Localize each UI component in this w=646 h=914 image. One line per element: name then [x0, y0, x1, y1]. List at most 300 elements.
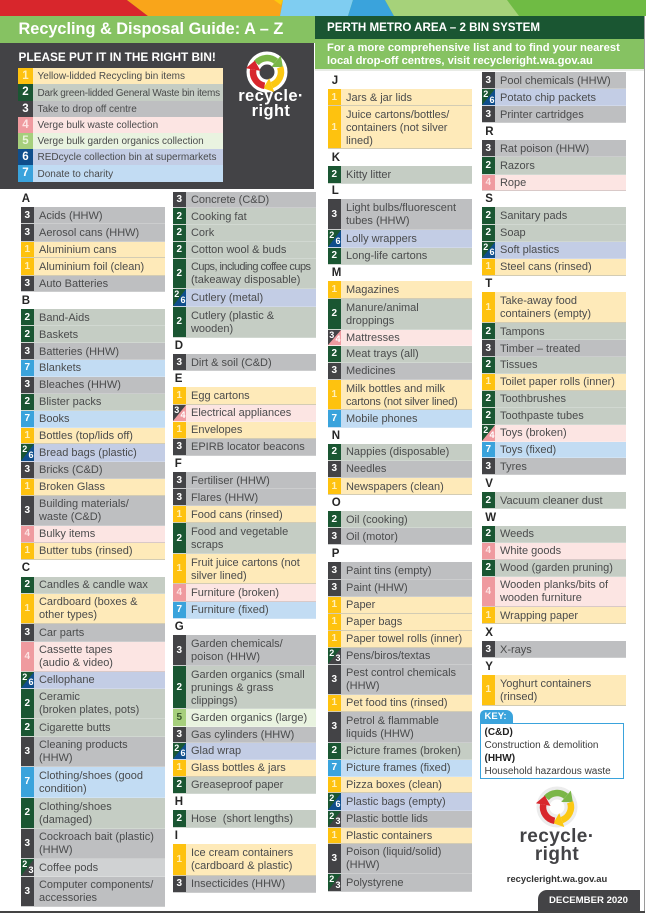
Mobile phones [328, 410, 472, 428]
Cardboard: other types) [39, 609, 97, 621]
Cassette tapes: (audio & video) [39, 657, 113, 669]
Clothing damaged [21, 798, 165, 829]
Pool chemicals [482, 72, 626, 89]
Flares: Flares (HHW) [191, 492, 258, 504]
Medicines: 3 [332, 365, 337, 376]
Poison: (HHW) [346, 859, 380, 871]
Nappies: 2 [332, 446, 337, 457]
Egg cartons [173, 387, 316, 405]
Long-life cartons [328, 248, 472, 265]
Polystyrene: Polystyrene [346, 877, 403, 889]
Rat poison: Rat poison (HHW) [500, 143, 589, 155]
legend row 2: 2 [22, 86, 29, 98]
Glass bottles: 1 [177, 762, 182, 773]
website info banner [315, 39, 644, 69]
Computer components: accessories [39, 892, 97, 904]
heading K: K [332, 152, 340, 164]
Cooking fat [173, 208, 316, 225]
Milk bottles: cartons (not silver lined) [346, 396, 458, 408]
Sanitary pads: Sanitary pads [500, 210, 567, 222]
Manure: Manure/animal [346, 302, 419, 314]
Picture frames fixed: Picture frames (fixed) [346, 762, 451, 774]
Furniture fixed: Furniture (fixed) [191, 604, 269, 616]
Steel cans [482, 259, 626, 276]
X-rays: 3 [486, 644, 491, 655]
Cork: Cork [191, 227, 214, 239]
Furniture broken [173, 584, 316, 602]
legend row 6: REDcycle collection bin at supermarkets [38, 152, 216, 163]
X-rays: X-rays [500, 644, 532, 656]
Pizza boxes: 1 [332, 779, 337, 790]
Juice cartons: Juice cartons/bottles/ [346, 109, 449, 121]
Building materials: Building materials/ [39, 498, 129, 510]
Dirt: 3 [177, 357, 182, 368]
Toothbrushes: 2 [486, 393, 491, 404]
Gas cylinders [173, 727, 316, 743]
legend row 1: Yellow-lidded Recycling bin items [38, 71, 185, 82]
Pet food tins [328, 695, 472, 712]
Pet food tins: Pet food tins (rinsed) [346, 697, 447, 709]
Clothing damaged: Clothing/shoes [39, 801, 112, 813]
Hose [173, 810, 316, 828]
heading C: C [22, 562, 30, 574]
legend row 1 [18, 68, 223, 84]
White goods [482, 543, 626, 560]
key tab: KEY: [484, 711, 506, 722]
Potato chip packets: Potato chip packets [500, 92, 596, 104]
Bread bags: Bread bags (plastic) [39, 447, 137, 459]
Cutlery metal: 2 [174, 289, 179, 299]
Garden organics small [173, 666, 316, 709]
title bar: Recycling & Disposal Guide: A – Z [18, 20, 283, 38]
wordmark [238, 87, 304, 120]
Nappies: Nappies (disposable) [346, 446, 449, 458]
Soft plastics: Soft plastics [500, 244, 559, 256]
Toys broken: Toys (broken) [500, 427, 567, 439]
Bricks: 3 [25, 464, 30, 475]
Food cans [173, 506, 316, 523]
Petrol: 3 [332, 721, 337, 732]
Clothing good: Clothing/shoes (good [39, 770, 143, 782]
Paper bags: Paper bags [346, 616, 402, 628]
Soap: 2 [486, 227, 491, 238]
Picture frames fixed [328, 760, 472, 777]
Wood: Wood (garden pruning) [500, 562, 613, 574]
Magazines: Magazines [346, 284, 399, 296]
Milk bottles: 1 [332, 389, 337, 400]
Plastic bottle lids: 3 [335, 816, 340, 826]
Pest control: 3 [332, 674, 337, 685]
Petrol: liquids (HHW) [346, 728, 414, 740]
Pest control: Pest control chemicals [346, 667, 456, 679]
Toothbrushes: Toothbrushes [500, 393, 566, 405]
Tyres: 3 [486, 461, 491, 472]
Rat poison: 3 [486, 143, 491, 154]
heading F: F [175, 458, 182, 470]
Insecticides: 3 [177, 878, 182, 889]
Paint: 3 [332, 582, 337, 593]
Soft plastics: 6 [489, 247, 494, 257]
Batteries: 3 [25, 346, 30, 357]
Toys broken: 2 [483, 425, 488, 435]
Picture frames broken [328, 743, 472, 760]
Garden chemicals: 3 [177, 645, 182, 656]
heading V: V [485, 478, 493, 490]
Potato chip packets: 6 [489, 95, 494, 105]
Cutlery plastic: 2 [177, 316, 182, 327]
Cups: (takeaway disposable) [191, 274, 300, 286]
panel: column 2 C to I [173, 192, 316, 893]
Aluminium foil: 1 [25, 261, 30, 272]
Kitty litter: Kitty litter [346, 169, 391, 181]
Computer components [21, 877, 165, 907]
Food and vegetable scraps: scraps [191, 539, 223, 551]
Envelopes [173, 422, 316, 439]
panel: column 3 J to P [328, 75, 472, 892]
Vacuum cleaner dust [482, 492, 626, 509]
heading O: O [332, 497, 341, 509]
Paper towel rolls [328, 631, 472, 648]
Tampons: Tampons [500, 326, 545, 338]
Batteries: Batteries (HHW) [39, 346, 119, 358]
Ceramic [21, 689, 165, 719]
Polystyrene [328, 874, 472, 892]
Pest control: (HHW) [346, 680, 380, 692]
Paper towel rolls: Paper towel rolls (inner) [346, 633, 462, 645]
Mobile phones: 7 [332, 413, 337, 424]
heading S: S [485, 193, 493, 205]
Toothpaste tubes [482, 408, 626, 425]
Ceramic: (broken plates, pots) [39, 704, 139, 716]
Cutlery plastic [173, 307, 316, 338]
Garden chemicals: poison (HHW) [191, 651, 260, 663]
Ice cream containers [173, 844, 316, 876]
Building materials: 3 [25, 505, 30, 516]
Pens: 2 [329, 648, 334, 658]
Garden organics small: 2 [177, 682, 182, 692]
Soap: Soap [500, 227, 526, 239]
Nappies [328, 444, 472, 461]
Take-away food containers: Take-away food [500, 295, 577, 307]
Cockroach bait: 3 [25, 838, 30, 849]
Paper [328, 597, 472, 614]
Clothing good: 7 [25, 776, 30, 787]
legend row 6: 6 [22, 151, 29, 163]
Computer components: 3 [25, 886, 30, 897]
Soap [482, 225, 626, 242]
Aluminium foil: Aluminium foil (clean) [39, 261, 144, 273]
legend row 4: Verge bulk waste collection [38, 120, 158, 131]
Cellophane [21, 672, 165, 689]
Envelopes: 1 [177, 424, 182, 435]
legend row 5 [18, 133, 223, 149]
White goods: 4 [486, 545, 491, 556]
heading B: B [22, 295, 30, 307]
Garden organics large: 5 [177, 712, 182, 723]
Flares [173, 489, 316, 506]
legend row 7: Donate to charity [38, 169, 113, 180]
Newspapers: Newspapers (clean) [346, 481, 444, 493]
Garden organics small: clippings) [191, 694, 237, 706]
White goods: White goods [500, 545, 561, 557]
Toilet paper rolls: 1 [486, 376, 491, 387]
Glass bottles: Glass bottles & jars [191, 762, 286, 774]
Timber [482, 340, 626, 357]
Furniture fixed [173, 602, 316, 619]
Lolly wrappers [328, 230, 472, 248]
icon: recycling arrows [246, 52, 288, 92]
Light bulbs [328, 199, 472, 230]
Cigarette butts [21, 719, 165, 737]
Cooking fat: 2 [177, 211, 182, 222]
Aluminium cans: 1 [25, 244, 30, 255]
Building materials [21, 496, 165, 526]
heading J: J [332, 75, 338, 87]
Oil cooking: 2 [332, 514, 337, 525]
Needles: 3 [332, 463, 337, 474]
Weeds: 2 [486, 528, 491, 539]
Bottles [21, 428, 165, 444]
Printer cartridges: Printer cartridges [500, 109, 584, 121]
Candles [21, 577, 165, 594]
wordmark: recycle· [238, 87, 304, 105]
Insecticides [173, 876, 316, 892]
Fruit juice cartons: silver lined) [191, 570, 247, 582]
Food cans: 1 [177, 509, 182, 520]
Timber: 3 [486, 343, 491, 354]
Yoghurt containers: (rinsed) [500, 691, 537, 703]
Pool chemicals: 3 [486, 75, 491, 86]
Paint tins: Paint tins (empty) [346, 565, 432, 577]
Pool chemicals: Pool chemicals (HHW) [500, 75, 611, 87]
Aluminium cans: Aluminium cans [39, 244, 117, 256]
Cotton wool: Cotton wool & buds [191, 244, 286, 256]
Blister packs: Blister packs [39, 396, 101, 408]
panel: column 4 P to Y [482, 72, 626, 706]
Toys fixed: 7 [486, 444, 491, 455]
Aluminium cans [21, 242, 165, 258]
Ceramic: 2 [25, 698, 30, 709]
Blankets [21, 360, 165, 377]
Computer components: Computer components/ [39, 879, 153, 891]
Fruit juice cartons [173, 554, 316, 584]
EPIRB: EPIRB locator beacons [191, 441, 305, 453]
heading P: P [332, 548, 339, 560]
Bulky items: 4 [25, 528, 30, 539]
Bleaches: 3 [25, 379, 30, 390]
website url: recycleright.wa.gov.au [507, 873, 607, 884]
heading D: D [175, 340, 183, 352]
Newspapers [328, 478, 472, 495]
Egg cartons: Egg cartons [191, 390, 250, 402]
Baskets: 2 [25, 329, 30, 340]
Garden organics large [173, 709, 316, 727]
legend row 2 [18, 84, 223, 101]
Electrical appliances [173, 405, 316, 422]
Poison: Poison (liquid/solid) [346, 846, 441, 858]
Kitty litter: 2 [332, 169, 337, 180]
heading A: A [22, 193, 30, 205]
Picture frames broken: 2 [332, 745, 337, 756]
Toothbrushes [482, 391, 626, 408]
Toilet paper rolls [482, 374, 626, 391]
Car parts: 3 [25, 627, 30, 638]
Kitty litter [328, 166, 472, 184]
Cigarette butts: Cigarette butts [39, 722, 111, 734]
Hose: 2 [177, 813, 182, 824]
Glad wrap: 6 [180, 748, 185, 758]
heading M: M [332, 267, 341, 279]
key definitions: Household hazardous waste [484, 766, 611, 777]
Fertiliser: 3 [177, 475, 182, 486]
Cassette tapes: 4 [25, 651, 30, 662]
key definitions: Construction & demolition [484, 740, 598, 751]
Medicines: Medicines [346, 365, 396, 377]
Jars: 1 [332, 92, 337, 103]
Cassette tapes [21, 642, 165, 672]
Mattresses: Mattresses [346, 332, 400, 344]
Oil motor: Oil (motor) [346, 531, 398, 543]
Auto Batteries: Auto Batteries [39, 278, 108, 290]
Tyres [482, 458, 626, 475]
Concrete [173, 192, 316, 208]
Toothpaste tubes: 2 [486, 410, 491, 421]
Cups: Cups, including coffee cups [191, 261, 310, 273]
Pizza boxes [328, 777, 472, 793]
Yoghurt containers [482, 675, 626, 706]
Clothing good [21, 767, 165, 798]
Electrical appliances: Electrical appliances [191, 407, 291, 419]
Steel cans: Steel cans (rinsed) [500, 261, 592, 273]
Baskets [21, 326, 165, 343]
Manure: 2 [332, 308, 337, 319]
Glad wrap: 2 [174, 743, 179, 753]
Paint: Paint (HHW) [346, 582, 408, 594]
Potato chip packets: 2 [483, 89, 488, 99]
Cutlery plastic: Cutlery (plastic & [191, 310, 274, 322]
Vacuum cleaner dust: 2 [486, 495, 491, 506]
legend row 6 [18, 149, 223, 165]
Cups [173, 259, 316, 289]
Rat poison [482, 140, 626, 157]
Books: 7 [25, 413, 30, 424]
Mattresses: 3 [329, 330, 334, 340]
panel: column 1 A to C [21, 193, 165, 907]
date tab: DECEMBER 2020 [549, 895, 628, 906]
Insecticides: Insecticides (HHW) [191, 878, 285, 890]
Magazines [328, 281, 472, 299]
Broken Glass: Broken Glass [39, 481, 105, 493]
heading W: W [485, 512, 496, 524]
Greaseproof paper [173, 777, 316, 794]
Picture frames broken: Picture frames (broken) [346, 745, 461, 757]
Fertiliser [173, 472, 316, 489]
Cleaning products [21, 737, 165, 767]
Mobile phones: Mobile phones [346, 413, 418, 425]
Paint tins [328, 562, 472, 580]
Car parts: Car parts [39, 627, 84, 639]
Pest control [328, 665, 472, 695]
Rope: Rope [500, 177, 526, 189]
legend row 5: Verge bulk garden organics collection [38, 136, 204, 147]
Oil cooking: Oil (cooking) [346, 514, 408, 526]
Paper bags [328, 614, 472, 631]
Bricks: Bricks (C&D) [39, 464, 103, 476]
Dirt: Dirt & soil (C&D) [191, 357, 272, 369]
Auto Batteries: 3 [25, 278, 30, 289]
Plastic bags: 2 [329, 793, 334, 803]
Wrapping paper [482, 607, 626, 624]
heading Y: Y [485, 661, 493, 673]
Cotton wool [173, 242, 316, 259]
Rope [482, 175, 626, 191]
Plastic bottle lids: 2 [329, 811, 334, 821]
Juice cartons: 1 [332, 122, 337, 133]
heading L: L [332, 185, 339, 197]
Concrete: 3 [177, 194, 182, 205]
Sanitary pads: 2 [486, 210, 491, 221]
Wooden planks: 4 [486, 586, 491, 597]
Light bulbs: 3 [332, 209, 337, 220]
Auto Batteries [21, 276, 165, 292]
Ice cream containers: 1 [177, 854, 182, 865]
Plastic bags: 6 [335, 799, 340, 809]
Blister packs [21, 394, 165, 411]
Weeds [482, 526, 626, 543]
Band-Aids [21, 309, 165, 326]
Cutlery metal [173, 289, 316, 307]
Garden organics large: Garden organics (large) [191, 712, 307, 724]
Razors: Razors [500, 160, 535, 172]
Tampons: 2 [486, 326, 491, 337]
Pens: 3 [335, 653, 340, 663]
Wooden planks: wooden furniture [500, 592, 582, 604]
Blankets: Blankets [39, 362, 81, 374]
Baskets: Baskets [39, 329, 78, 341]
panel: key [480, 710, 624, 779]
EPIRB: 3 [177, 441, 182, 452]
Paint [328, 580, 472, 597]
Soft plastics: 2 [483, 242, 488, 252]
Building materials: waste (C&D) [39, 511, 101, 523]
Paper bags: 1 [332, 616, 337, 627]
panel heading: PLEASE PUT IT IN THE RIGHT BIN! [18, 50, 216, 64]
Fertiliser: Fertiliser (HHW) [191, 475, 270, 487]
Lolly wrappers: 6 [335, 236, 340, 246]
Cardboard: Cardboard (boxes & [39, 596, 137, 608]
Magazines: 1 [332, 284, 337, 295]
Candles: 2 [25, 579, 30, 590]
title bar [0, 16, 315, 43]
Pens [328, 648, 472, 665]
Take-away food containers: containers (empty) [500, 308, 591, 320]
Toys fixed: Toys (fixed) [500, 444, 556, 456]
legend row 7: 7 [22, 167, 29, 179]
key definitions [480, 723, 624, 779]
wordmark [519, 826, 595, 865]
Electrical appliances: 4 [180, 410, 185, 420]
Juice cartons [328, 106, 472, 149]
Blankets: 7 [25, 362, 30, 373]
Picture frames fixed: 7 [332, 762, 337, 773]
Plastic containers: 1 [332, 830, 337, 841]
legend row 2: Dark green-lidded General Waste bin items [38, 88, 220, 99]
Gas cylinders: Gas cylinders (HHW) [191, 729, 294, 741]
Jars [328, 89, 472, 106]
Flares: 3 [177, 492, 182, 503]
Manure: droppings [346, 315, 394, 327]
heading H: H [175, 796, 183, 808]
